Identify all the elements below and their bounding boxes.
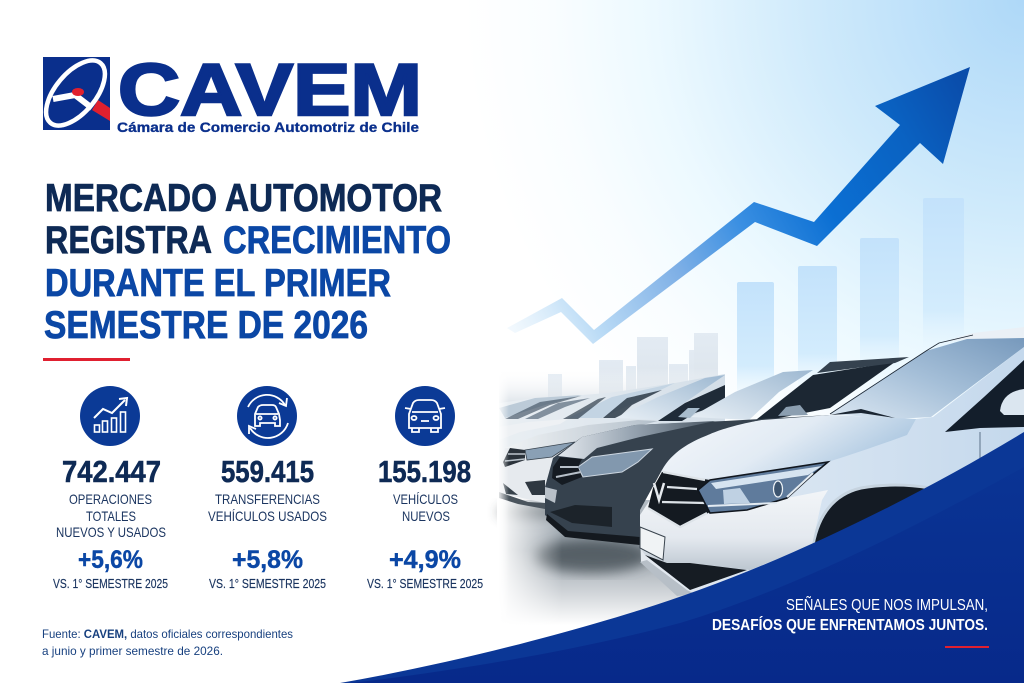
- label: [208, 491, 327, 524]
- silver windshield: [615, 375, 725, 420]
- dark roof: [817, 357, 909, 373]
- label: NUEVOS: [402, 508, 450, 524]
- label: TRANSFERENCIAS: [215, 491, 320, 507]
- stat: transferencias: [208, 386, 327, 591]
- title: SEMESTRE DE 2026: [44, 304, 368, 347]
- dark mirror: [778, 405, 808, 416]
- wiper: [830, 409, 895, 418]
- tagline: SEÑALES QUE NOS IMPULSAN,: [786, 594, 988, 614]
- swoosh inner band: [350, 467, 1024, 683]
- source note: [42, 627, 293, 658]
- silver bottom band: [499, 492, 545, 509]
- icon: bar chart with arrow: [80, 386, 140, 446]
- silver body: [499, 420, 658, 503]
- label: OPERACIONES: [69, 491, 152, 507]
- far cars: [499, 374, 725, 475]
- silver lower vent: [525, 480, 545, 495]
- dark lower vents: [550, 505, 612, 527]
- dark body: [545, 415, 830, 545]
- title: CRECIMIENTO: [223, 219, 451, 262]
- number: 559.415: [221, 454, 314, 489]
- parking floor: [499, 500, 709, 625]
- headlight lens: [774, 481, 782, 497]
- percent change: +4,9%: [389, 546, 461, 574]
- silver grille: [503, 448, 525, 467]
- headlight light bar: [708, 473, 813, 506]
- silver headlight: [525, 442, 575, 460]
- badge: [654, 483, 664, 500]
- dark splitter: [546, 514, 640, 545]
- title red rule: [43, 358, 130, 361]
- comparison: VS. 1° SEMESTRE 2025: [367, 577, 483, 591]
- dark windshield: [691, 370, 813, 420]
- silver side window: [658, 385, 725, 421]
- label: VEHÍCULOS: [393, 491, 458, 507]
- wordmark: CAVEM: [118, 50, 422, 131]
- percent change: +5,8%: [232, 546, 303, 574]
- front splitter: [640, 560, 695, 596]
- title: DURANTE EL PRIMER: [45, 262, 391, 305]
- silver grille slats: [505, 454, 525, 461]
- headlight chrome strip: [711, 466, 822, 489]
- wheel arch: [813, 485, 930, 545]
- steering wheel emblem: [35, 50, 116, 136]
- white car body: [640, 347, 1024, 600]
- source note: Fuente: CAVEM, datos oficiales correspondientes: [42, 627, 293, 641]
- dark grille slats: [556, 467, 581, 477]
- blue swoosh panel: [340, 432, 1024, 683]
- number: 742.447: [62, 454, 161, 489]
- tagline red rule: [945, 646, 989, 648]
- stat: vehiculos nuevos: [367, 386, 483, 591]
- silver hood: [505, 420, 658, 449]
- silver vent left: [503, 483, 518, 495]
- grille slats: [648, 472, 707, 527]
- label: NUEVOS Y USADOS: [56, 524, 166, 540]
- dark headlight: [578, 449, 652, 477]
- floor left fade: [497, 498, 562, 628]
- bumper: [640, 490, 828, 570]
- tagline: [712, 594, 988, 634]
- title: [44, 177, 451, 347]
- comparison: VS. 1° SEMESTRE 2025: [53, 577, 168, 591]
- percent change: +5,6%: [78, 546, 143, 574]
- photo left fade: [497, 368, 509, 638]
- label: [56, 491, 166, 540]
- dark plate: [545, 487, 557, 503]
- dark hood highlight: [558, 421, 715, 459]
- stat: operaciones totales: [53, 386, 168, 591]
- lower air dam: [645, 555, 747, 590]
- grille: [648, 472, 710, 528]
- label: [393, 491, 458, 524]
- white car: [640, 327, 1024, 600]
- label: TOTALES: [86, 508, 136, 524]
- headlight lens patch: [723, 488, 750, 504]
- title: MERCADO AUTOMOTOR: [45, 177, 442, 220]
- growth bars: [737, 198, 964, 402]
- car shadows: [498, 505, 650, 573]
- number: 155.198: [378, 454, 471, 489]
- dark grille: [552, 457, 582, 485]
- silver car: [499, 375, 725, 509]
- headlight: [698, 462, 828, 513]
- city skyline: [548, 333, 718, 404]
- white car hood: [662, 415, 916, 478]
- logo: CAVEM: [35, 50, 422, 136]
- source note: a junio y primer semestre de 2026.: [42, 644, 223, 658]
- logo subtitle: Cámara de Comercio Automotriz de Chile: [117, 120, 420, 135]
- silver mirror: [678, 408, 700, 418]
- title: REGISTRA: [45, 219, 212, 262]
- dark side window: [752, 362, 895, 423]
- icon: car with cycle arrows: [237, 386, 297, 446]
- white car windshield: [830, 338, 1024, 419]
- door line: [979, 432, 981, 460]
- license plate: [640, 527, 665, 560]
- icon: car front: [395, 386, 455, 446]
- dark car: [545, 357, 909, 545]
- white car roof: [939, 327, 1024, 343]
- growth arrow: [507, 67, 970, 344]
- windshield edge: [830, 335, 973, 414]
- label: VEHÍCULOS USADOS: [208, 508, 327, 524]
- tagline: DESAFÍOS QUE ENFRENTAMOS JUNTOS.: [712, 615, 988, 634]
- comparison: VS. 1° SEMESTRE 2025: [209, 577, 326, 591]
- mirror: [1000, 389, 1024, 415]
- horizon haze: [499, 368, 719, 406]
- side window: [945, 360, 1024, 432]
